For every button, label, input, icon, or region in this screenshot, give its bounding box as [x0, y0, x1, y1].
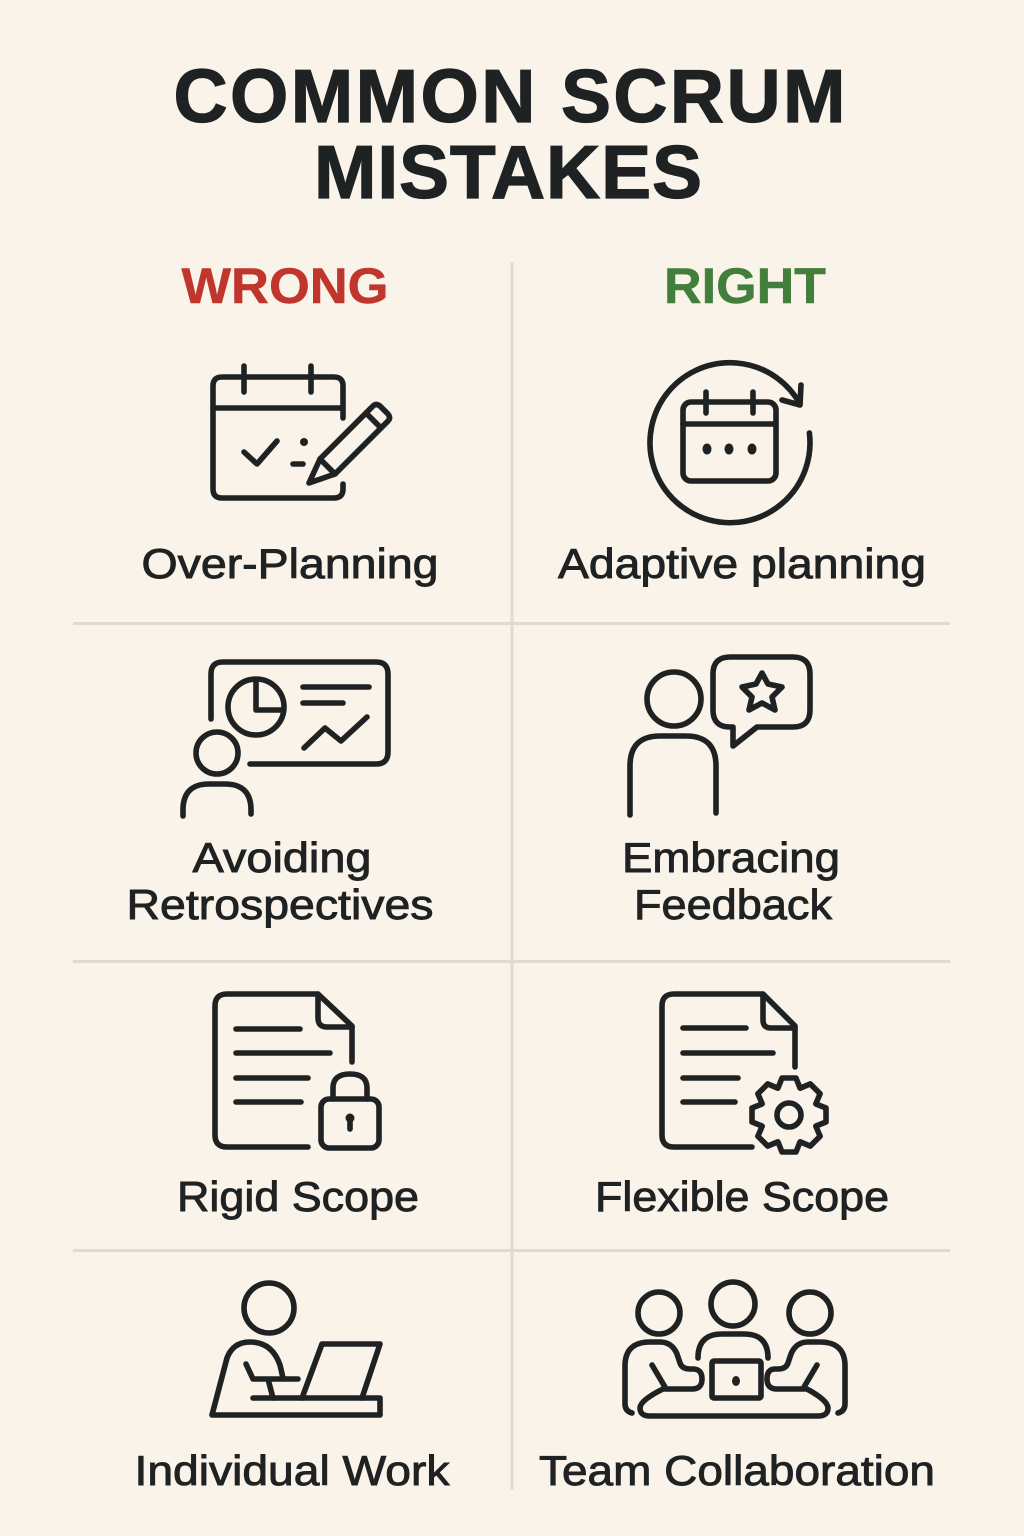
label: flexible scope: Flexible Scope: [595, 1173, 889, 1220]
icon: person with feedback bubble: [630, 657, 810, 815]
icon: document with gear: [662, 994, 826, 1152]
label: team collaboration: Team Collaboration: [539, 1447, 935, 1494]
title: MISTAKES: [314, 130, 702, 214]
label: avoiding retrospectives: [126, 834, 434, 928]
label: rigid scope: Rigid Scope: [177, 1173, 419, 1220]
title: [174, 54, 846, 214]
icon: individual at laptop: [212, 1283, 380, 1415]
label: individual work: Individual Work: [134, 1447, 451, 1494]
icon: document with lock: [215, 994, 379, 1148]
icon: presenter with chart board: [183, 662, 388, 816]
label: embracing feedback: Feedback: [634, 881, 833, 928]
icon: adaptive planning calendar cycle: [650, 363, 810, 523]
label: avoiding retrospectives: Avoiding: [192, 834, 372, 881]
label: embracing feedback: Embracing: [622, 834, 840, 881]
icon: calendar with pencil: [213, 366, 390, 498]
title: COMMON SCRUM: [174, 54, 846, 138]
label: embracing feedback: [622, 834, 840, 928]
label: over-planning: Over-Planning: [142, 540, 438, 587]
icon: team around a table: [625, 1282, 845, 1416]
heading: wrong column: WRONG: [182, 258, 388, 314]
label: avoiding retrospectives: Retrospectives: [126, 881, 434, 928]
label: adaptive planning: Adaptive planning: [558, 540, 926, 587]
heading: right column: RIGHT: [664, 258, 826, 314]
